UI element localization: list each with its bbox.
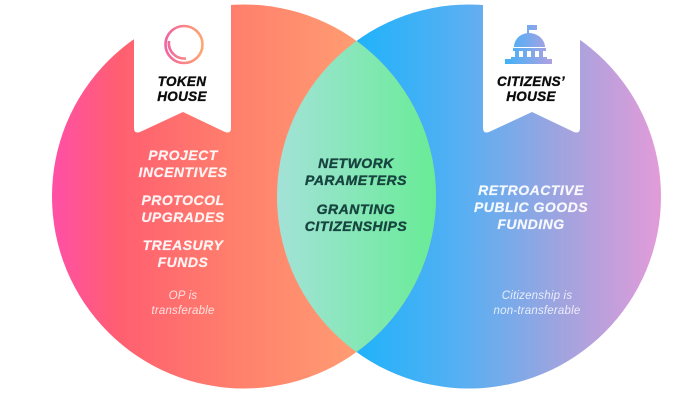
text: token house list: FUNDS (158, 254, 209, 270)
heading: Token House: TOKEN (158, 74, 206, 89)
venn circle: left (52, 4, 436, 388)
text: OP is transferable: OP is (169, 290, 197, 302)
text: retroactive public goods funding: RETROACTIVE (478, 182, 584, 198)
text: token house list: PROTOCOL (141, 192, 225, 208)
text: shared powers: GRANTING (317, 201, 395, 217)
text: retroactive public goods funding: PUBLIC GOODS (474, 199, 588, 215)
venn circle: right (277, 4, 661, 388)
text: shared powers: PARAMETERS (305, 172, 407, 188)
text: shared powers: CITIZENSHIPS (305, 218, 407, 234)
text: token house list: PROJECT (148, 147, 218, 163)
icon: capitol building (505, 25, 552, 64)
text: token house list: UPGRADES (141, 209, 225, 225)
text: shared powers: NETWORK (318, 155, 394, 171)
text: token house list (138, 147, 228, 270)
heading: Token House: HOUSE (157, 89, 207, 104)
text: citizenship is non-transferable: Citizenship is (502, 290, 572, 302)
text: token house list: INCENTIVES (138, 164, 228, 180)
venn overlap (277, 41, 436, 352)
text: shared powers (305, 155, 407, 234)
text: retroactive public goods funding: FUNDING (497, 216, 565, 232)
icon: token house rings (166, 26, 202, 63)
heading: Citizens' House: CITIZENS’ (497, 74, 565, 89)
panel: Token House banner (134, 0, 231, 132)
text: OP is transferable: transferable (151, 305, 215, 317)
heading: Citizens' House: HOUSE (506, 89, 556, 104)
panel: Citizens' House banner (483, 0, 580, 132)
text: token house list: TREASURY (143, 237, 223, 253)
text: citizenship is non-transferable: non-transferable (494, 305, 580, 317)
